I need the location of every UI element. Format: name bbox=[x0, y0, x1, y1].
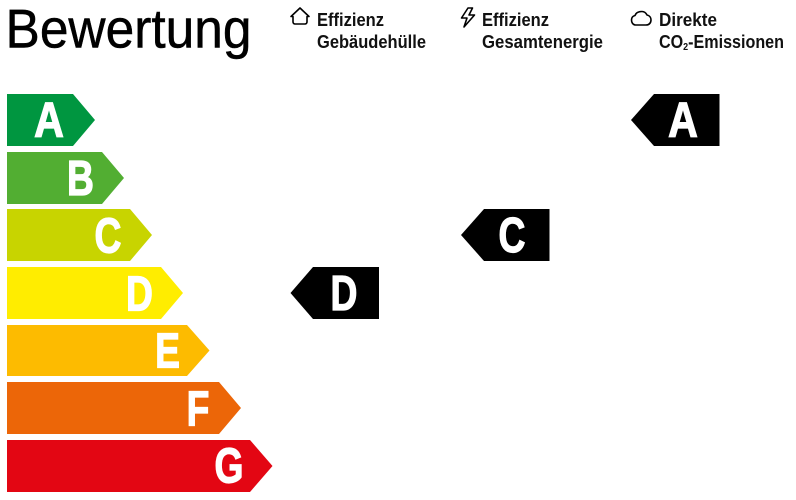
label: Effizienz Gesamtenergie bbox=[482, 10, 603, 52]
label: Effizienz Gebäudehülle bbox=[317, 10, 426, 52]
bar D: D bbox=[126, 268, 153, 322]
bar E bbox=[7, 325, 210, 379]
legend: Effizienz Gebäudehülle bbox=[291, 8, 426, 52]
bar B bbox=[7, 152, 124, 206]
bar A bbox=[7, 92, 95, 147]
rating scale bbox=[7, 92, 272, 494]
icon: lightning bolt bbox=[462, 8, 474, 27]
label: Direkte CO2-Emissionen: CO bbox=[659, 32, 686, 52]
bar G bbox=[7, 440, 272, 494]
bar E: E bbox=[155, 325, 180, 379]
label: Direkte CO2-Emissionen: 2 bbox=[683, 42, 689, 53]
rating marker: CO2-Emissionen A bbox=[631, 92, 720, 147]
rating marker: Gebäudehülle D bbox=[290, 267, 379, 321]
bar G: G bbox=[215, 440, 243, 494]
label: Effizienz Gesamtenergie: Gesamtenergie bbox=[482, 32, 603, 52]
icon: cloud bbox=[632, 12, 651, 25]
bar F: F bbox=[187, 383, 209, 437]
label: Direkte CO2-Emissionen: Direkte bbox=[659, 10, 717, 30]
rating marker: Gesamtenergie C: C bbox=[499, 209, 525, 263]
label: Effizienz Gesamtenergie: Effizienz bbox=[482, 10, 549, 30]
rating marker: CO2-Emissionen A: A bbox=[668, 92, 698, 147]
bar A: A bbox=[34, 92, 64, 147]
bar C bbox=[7, 209, 152, 264]
icon: house bbox=[291, 8, 309, 24]
bar C: C bbox=[95, 210, 121, 264]
rating marker: Gebäudehülle D: D bbox=[331, 267, 357, 321]
legend: Effizienz Gesamtenergie bbox=[462, 8, 603, 52]
rating marker: Gesamtenergie C bbox=[461, 209, 550, 263]
bar B: B bbox=[67, 152, 94, 206]
bar D bbox=[7, 267, 183, 322]
label: Effizienz Gebäudehülle: Effizienz bbox=[317, 10, 384, 30]
label: Effizienz Gebäudehülle: Gebäudehülle bbox=[317, 32, 426, 52]
label: Direkte CO2-Emissionen: -Emissionen bbox=[688, 32, 784, 52]
bar F bbox=[7, 382, 241, 437]
legend: Direkte CO2-Emissionen bbox=[632, 10, 784, 53]
label: Direkte CO2-Emissionen bbox=[659, 10, 784, 53]
